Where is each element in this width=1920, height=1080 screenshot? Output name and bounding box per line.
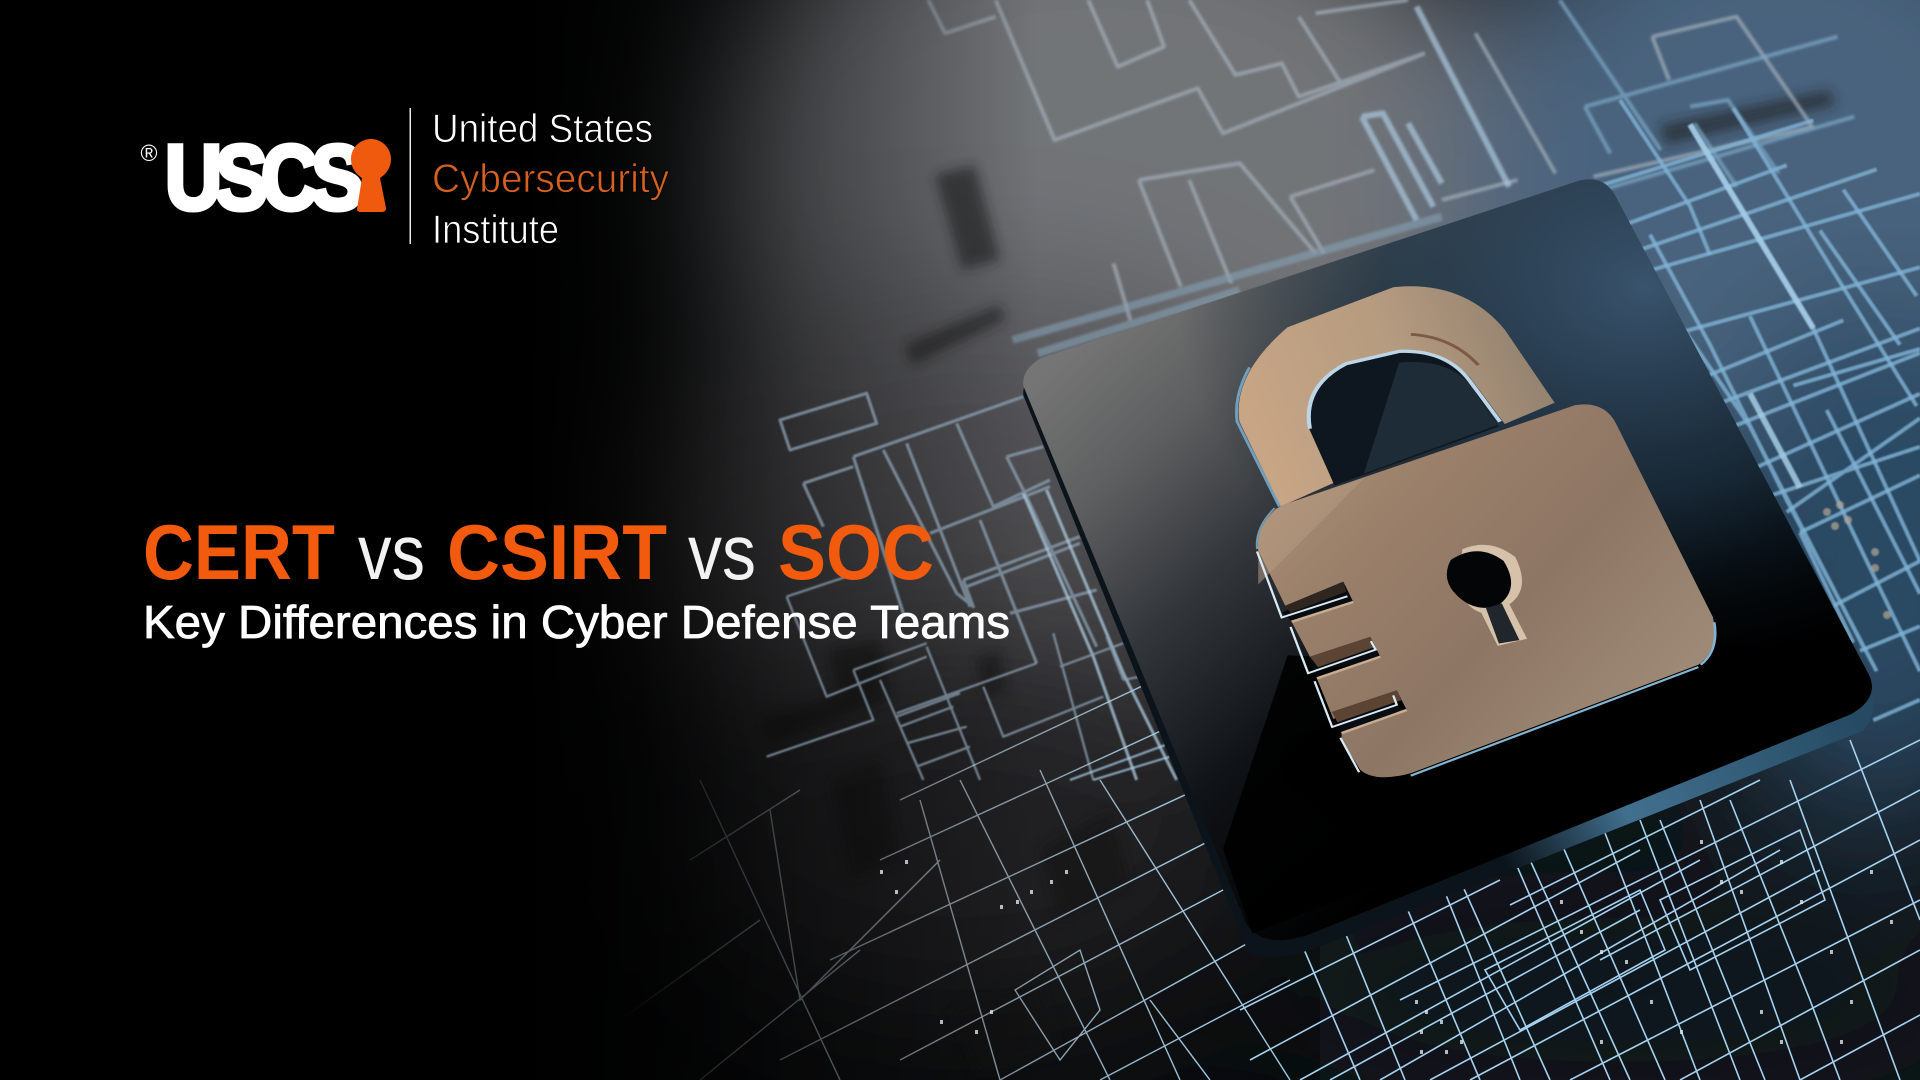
title: CERT bbox=[143, 508, 335, 596]
plate and padlock bbox=[1023, 179, 1873, 957]
circuit traces: sharp lower group bbox=[620, 640, 1920, 1080]
circuit traces: right blue group bbox=[1600, 100, 1920, 720]
lock body highlights bbox=[1257, 478, 1715, 776]
logo registered mark: ® bbox=[141, 140, 158, 166]
title: CSIRT bbox=[447, 508, 667, 596]
logo divider bbox=[410, 108, 411, 244]
logo bbox=[141, 107, 669, 252]
lock teeth slot backing bbox=[1282, 584, 1411, 735]
lock body bbox=[1258, 404, 1714, 777]
title: vs bbox=[688, 508, 756, 596]
logo letters USCS: USCS bbox=[165, 127, 361, 229]
plate top face bbox=[1023, 179, 1872, 940]
title: SOC bbox=[778, 508, 934, 596]
shackle bbox=[1236, 286, 1555, 507]
logo wordmark bbox=[432, 107, 669, 252]
circuit traces: blurred upper group bbox=[928, 0, 1854, 353]
circuit traces: mid-left group bbox=[767, 393, 1177, 780]
title: vs bbox=[358, 508, 425, 596]
keyhole bbox=[1447, 545, 1527, 646]
lock shadow bbox=[1305, 665, 1763, 853]
logo keyhole icon bbox=[351, 139, 391, 212]
logo wordmark: Cybersecurity bbox=[432, 157, 669, 201]
title bbox=[143, 508, 934, 596]
subtitle: Key Differences in Cyber Defense Teams bbox=[143, 596, 1010, 648]
logo wordmark: United States bbox=[432, 107, 653, 151]
plate side edge bbox=[1023, 189, 1873, 957]
logo wordmark: Institute bbox=[432, 208, 559, 252]
